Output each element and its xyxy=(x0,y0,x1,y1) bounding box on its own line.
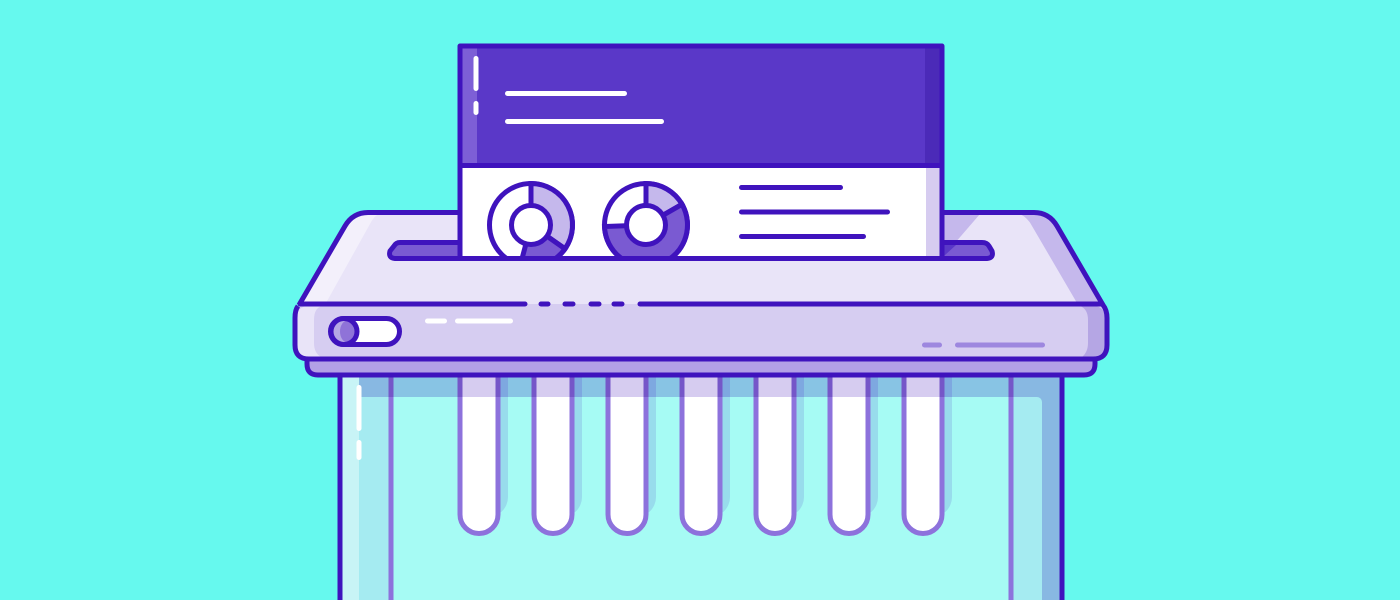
darkened lines inside cast shadow xyxy=(391,375,1011,397)
shredder lower lip xyxy=(307,359,1095,375)
bin left shade band xyxy=(359,375,391,600)
strip tops in shadow xyxy=(462,375,940,397)
bin inner right line xyxy=(1008,375,1014,600)
paper base line at slot xyxy=(460,256,942,261)
bin left highlight band xyxy=(342,375,359,600)
bin centre cast shadow xyxy=(391,375,1011,397)
sheet of paper xyxy=(460,46,942,276)
lid outline xyxy=(299,212,1103,305)
purple indicator dashes xyxy=(922,342,1045,348)
bin white glare marks xyxy=(356,385,362,460)
bar body xyxy=(295,304,1107,359)
shredder lid xyxy=(299,212,1103,305)
slot shade beside paper xyxy=(942,245,956,256)
bin glass fill xyxy=(340,375,1062,600)
paper outline xyxy=(460,46,942,276)
donut chart 2 xyxy=(604,183,688,266)
paper dark header xyxy=(477,48,925,163)
lid left highlight xyxy=(303,214,379,303)
strip shadows inside cast shadow xyxy=(498,375,952,397)
bin: transparent container xyxy=(340,370,1062,600)
donut chart 1 xyxy=(490,184,573,267)
header white marks xyxy=(474,56,664,124)
bin right shade band xyxy=(1011,375,1042,600)
bar left highlight xyxy=(297,306,322,357)
lid right shade xyxy=(1020,214,1099,303)
paper strip shadows xyxy=(488,375,952,517)
power toggle switch xyxy=(330,318,400,344)
bar top dashed seam xyxy=(300,302,1102,306)
bin left cast shadow xyxy=(359,375,391,397)
lid shade beside paper xyxy=(942,214,980,258)
illustration: paper shredder xyxy=(292,44,1110,600)
white indicator dashes xyxy=(425,318,513,324)
bar right shade xyxy=(1080,306,1105,357)
lid body xyxy=(299,212,1103,305)
header right shade xyxy=(925,48,940,164)
paper slot xyxy=(390,242,992,258)
paper white body xyxy=(462,168,926,256)
body right shade xyxy=(926,168,940,256)
bar outline lower xyxy=(295,305,1107,359)
bin inner left line xyxy=(388,375,394,600)
bin outer walls xyxy=(340,372,1062,600)
shredder control bar xyxy=(295,304,1107,359)
header left highlight xyxy=(462,48,477,164)
shredded paper strips xyxy=(460,370,942,534)
bin right dark band xyxy=(1011,375,1060,600)
paper text lines xyxy=(739,185,890,239)
